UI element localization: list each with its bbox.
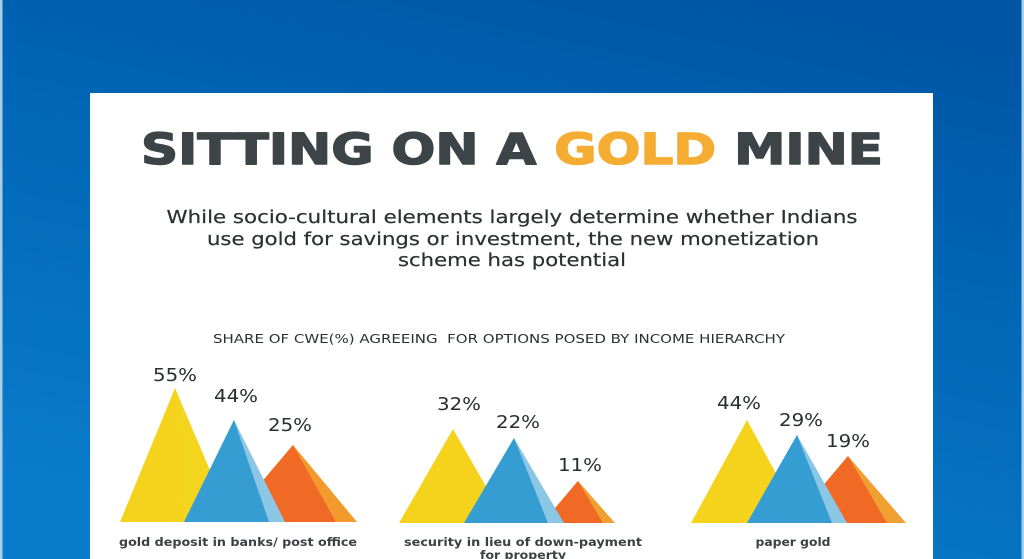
triangle: 32% yellow (399, 429, 507, 523)
value: 19%: 19% (826, 431, 870, 452)
subtitle (166, 208, 858, 271)
value: 32%: 32% (437, 394, 481, 415)
chart: paper gold (691, 393, 906, 549)
panel: white card (90, 93, 933, 559)
value: 11%: 11% (558, 455, 602, 476)
triangle: 44% blue (184, 420, 285, 522)
chart heading: SHARE OF CWE(%) AGREEING FOR OPTIONS POSED BY INCOME HIERARCHY (213, 332, 786, 346)
label: gold deposit in banks/ post office (119, 535, 357, 549)
value: 44%: 44% (717, 393, 761, 414)
subtitle: use gold for savings or investment, the new monetization (207, 230, 819, 250)
chart: security in lieu of down-payment (399, 394, 643, 559)
triangle: 29% blue (747, 435, 847, 523)
triangle: 55% yellow (120, 388, 232, 522)
label: paper gold (756, 535, 830, 549)
triangle: 11% orange (545, 481, 615, 523)
triangle: 22% blue (464, 438, 564, 523)
title: SITTING ON A GOLD MINE (141, 125, 883, 175)
value: 55%: 55% (153, 365, 197, 386)
chart: gold deposit in banks / post office (119, 365, 357, 549)
subtitle: scheme has potential (398, 251, 626, 271)
triangle: 44% yellow (691, 420, 803, 523)
value: 22%: 22% (496, 412, 540, 433)
value: 44%: 44% (214, 386, 258, 407)
label (404, 535, 643, 559)
triangle: 19% orange (810, 456, 906, 523)
label: security in lieu of down-payment (404, 535, 643, 549)
triangle: 25% orange (255, 445, 357, 522)
value: 29%: 29% (779, 410, 823, 431)
subtitle: While socio-cultural elements largely determine whether Indians (166, 208, 858, 228)
value: 25%: 25% (268, 415, 312, 436)
